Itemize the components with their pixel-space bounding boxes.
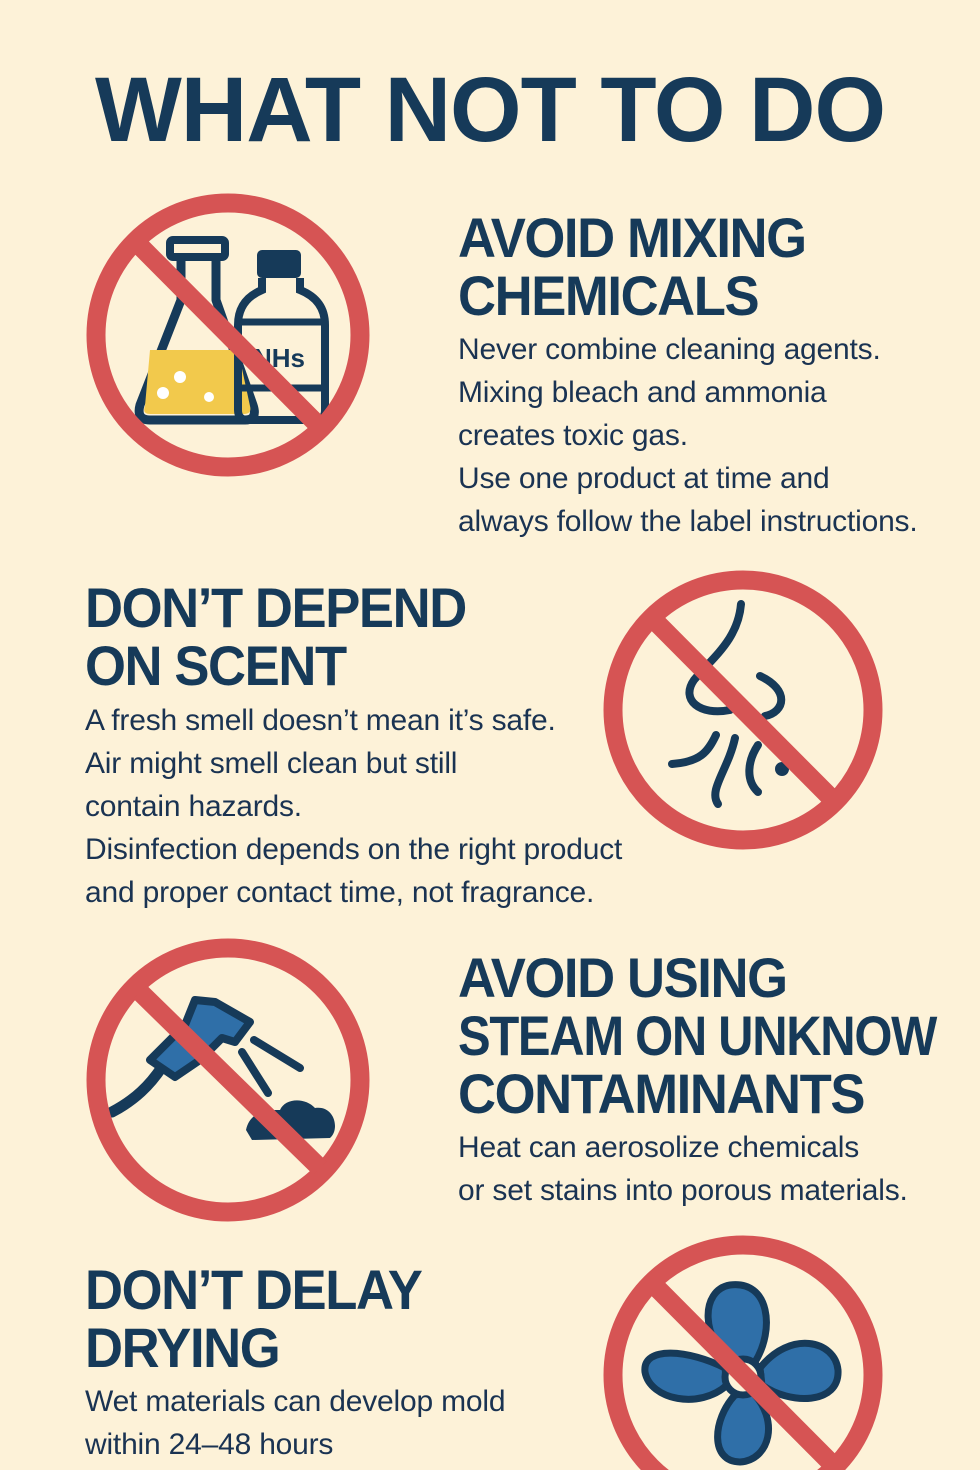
text: mixing chemicals body: always follow the label instructions. (458, 505, 918, 538)
text: scent body: A fresh smell doesn’t mean it’s safe. (85, 704, 556, 737)
text: scent body (85, 704, 622, 909)
heading: don't delay drying: DRYING (85, 1316, 279, 1379)
text: steam body (458, 1131, 908, 1207)
bottle (238, 250, 325, 420)
text: scent body: Air might smell clean but still (85, 747, 457, 780)
heading: avoid mixing chemicals: CHEMICALS (458, 264, 758, 327)
text: mixing chemicals body: Use one product at time and (458, 462, 830, 495)
heading: don't depend on scent (85, 576, 466, 697)
text: scent body: contain hazards. (85, 790, 302, 823)
heading: avoid mixing chemicals: AVOID MIXING (458, 206, 806, 269)
text: drying body: within 24–48 hours (85, 1428, 333, 1461)
title: WHAT NOT TO DO (95, 59, 885, 161)
heading: don't depend on scent: ON SCENT (85, 634, 346, 697)
heading: avoid steam (458, 946, 938, 1125)
heading: don't depend on scent: DON’T DEPEND (85, 576, 466, 639)
flask (139, 240, 254, 420)
icon: no mixing chemicals (86, 194, 370, 476)
text: drying body (85, 1385, 505, 1461)
heading: avoid mixing chemicals (458, 206, 806, 327)
text: steam body: or set stains into porous materials. (458, 1174, 908, 1207)
icon: fan (604, 1236, 882, 1470)
heading: avoid steam: STEAM ON UNKNOW (458, 1004, 936, 1067)
heading: don't delay drying: DON’T DELAY (85, 1258, 421, 1321)
text: mixing chemicals body: Mixing bleach and ammonia (458, 376, 827, 409)
text: scent body: and proper contact time, not fragrance. (85, 876, 594, 909)
text: mixing chemicals body: creates toxic gas. (458, 419, 688, 452)
icon: no smelling (604, 570, 882, 850)
bottle: NHs (253, 343, 305, 373)
heading: don't delay drying (85, 1258, 422, 1379)
text: mixing chemicals body (458, 333, 918, 538)
text: drying body: Wet materials can develop mold (85, 1385, 505, 1418)
icon: no steam (86, 938, 370, 1222)
text: steam body: Heat can aerosolize chemicals (458, 1131, 859, 1164)
text: scent body: Disinfection depends on the right product (85, 833, 622, 866)
heading: avoid steam: CONTAMINANTS (458, 1062, 864, 1125)
text: mixing chemicals body: Never combine cleaning agents. (458, 333, 881, 366)
heading: avoid steam: AVOID USING (458, 946, 787, 1009)
